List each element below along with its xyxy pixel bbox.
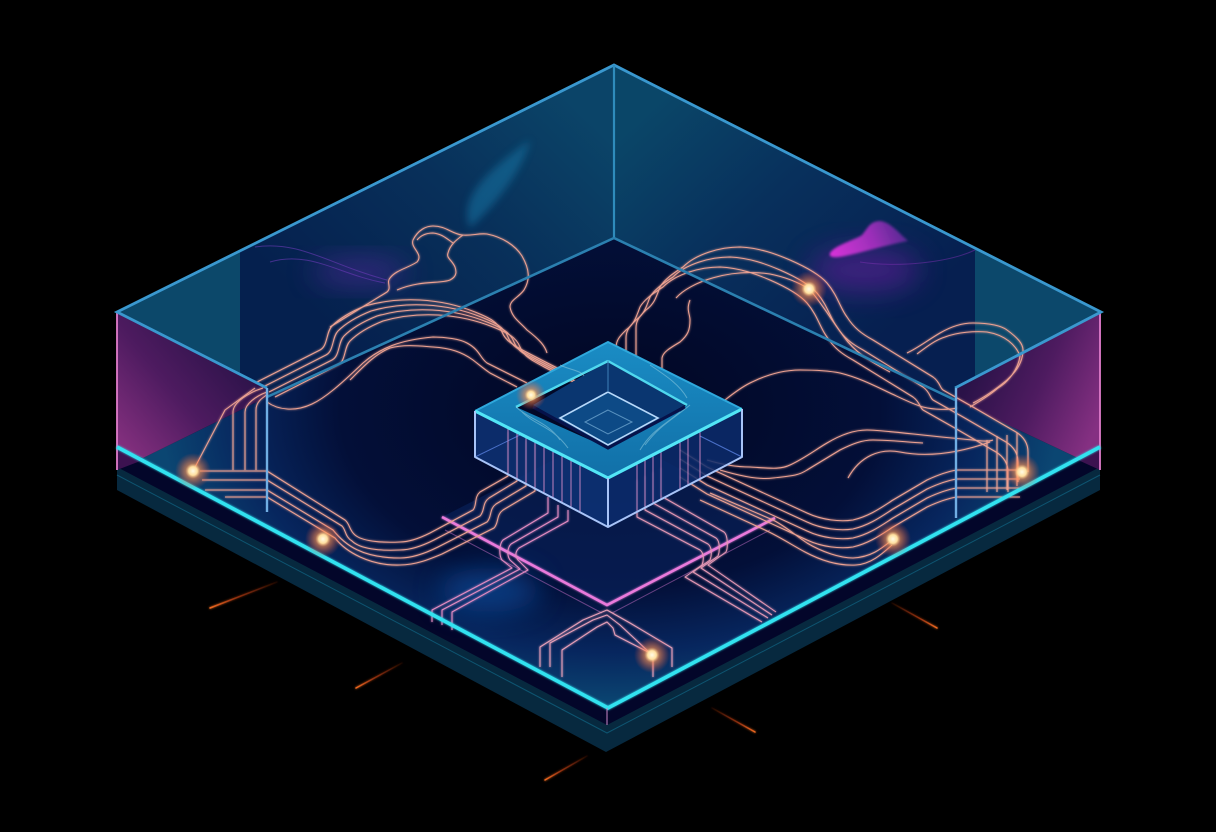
floor front edges [117,447,1100,725]
circuit traces [193,226,1028,677]
floor of chamber [117,238,1100,708]
chip well [533,361,685,448]
trace bundle: bottom arch to front node [540,610,672,677]
chip edges [475,342,742,527]
chip right side face [608,409,742,527]
chip well lines [516,361,687,448]
right purple end panel [955,312,1101,470]
trace bundle: corner to left node [193,388,268,471]
trace bundle: chip lower left [432,497,568,630]
back left glass wall [117,65,614,397]
trace bundle: chip to right node [680,450,1020,565]
orange floor reflections [210,582,937,780]
chip left side face [475,411,608,527]
base plate [117,447,1100,752]
trace loop: right [907,323,1023,407]
central chip [475,342,742,527]
trace bundle: left node to chip [200,432,535,565]
trace double arc: left centre [267,337,527,409]
trace waves: right centre [707,430,993,479]
front vertical corners [267,388,956,518]
chip inner back lines [475,435,742,457]
chip legs visible through side faces [508,428,700,512]
trace bundle: chip lower right [637,468,776,622]
back right glass wall [614,65,1101,400]
left purple end panel [117,312,267,470]
glass chamber rim [117,65,1101,400]
floor diamond tint [442,432,775,605]
trace bundle: upper left [257,300,583,397]
glowing nodes [175,271,1040,673]
trace loop: blob at top left [330,226,547,353]
magenta and teal glow smears [255,140,975,612]
trace bundle: top right to right node [616,247,1028,492]
pink inner square on the floor [442,517,775,613]
chip top rim [475,342,742,478]
trace arc: single long arc [725,370,957,409]
chip rim ghost traces [516,365,690,450]
trace bundle: right verticals [987,433,1017,492]
